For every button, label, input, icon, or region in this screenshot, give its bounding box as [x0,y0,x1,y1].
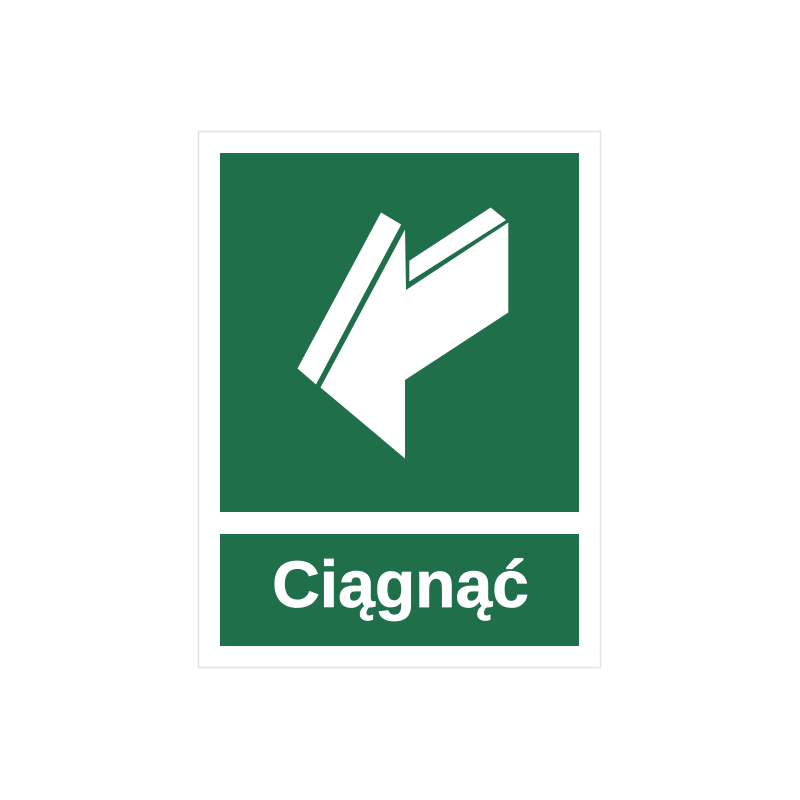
arrow body [320,222,508,458]
arrow handle bar left [298,212,401,384]
label text: Ciągnąć [272,547,529,621]
icon: pull arrow [298,208,508,458]
panel: green label background [220,534,579,646]
arrow top bar [409,208,506,282]
panel: green pictogram background [220,153,579,512]
sign board outline [198,132,600,668]
